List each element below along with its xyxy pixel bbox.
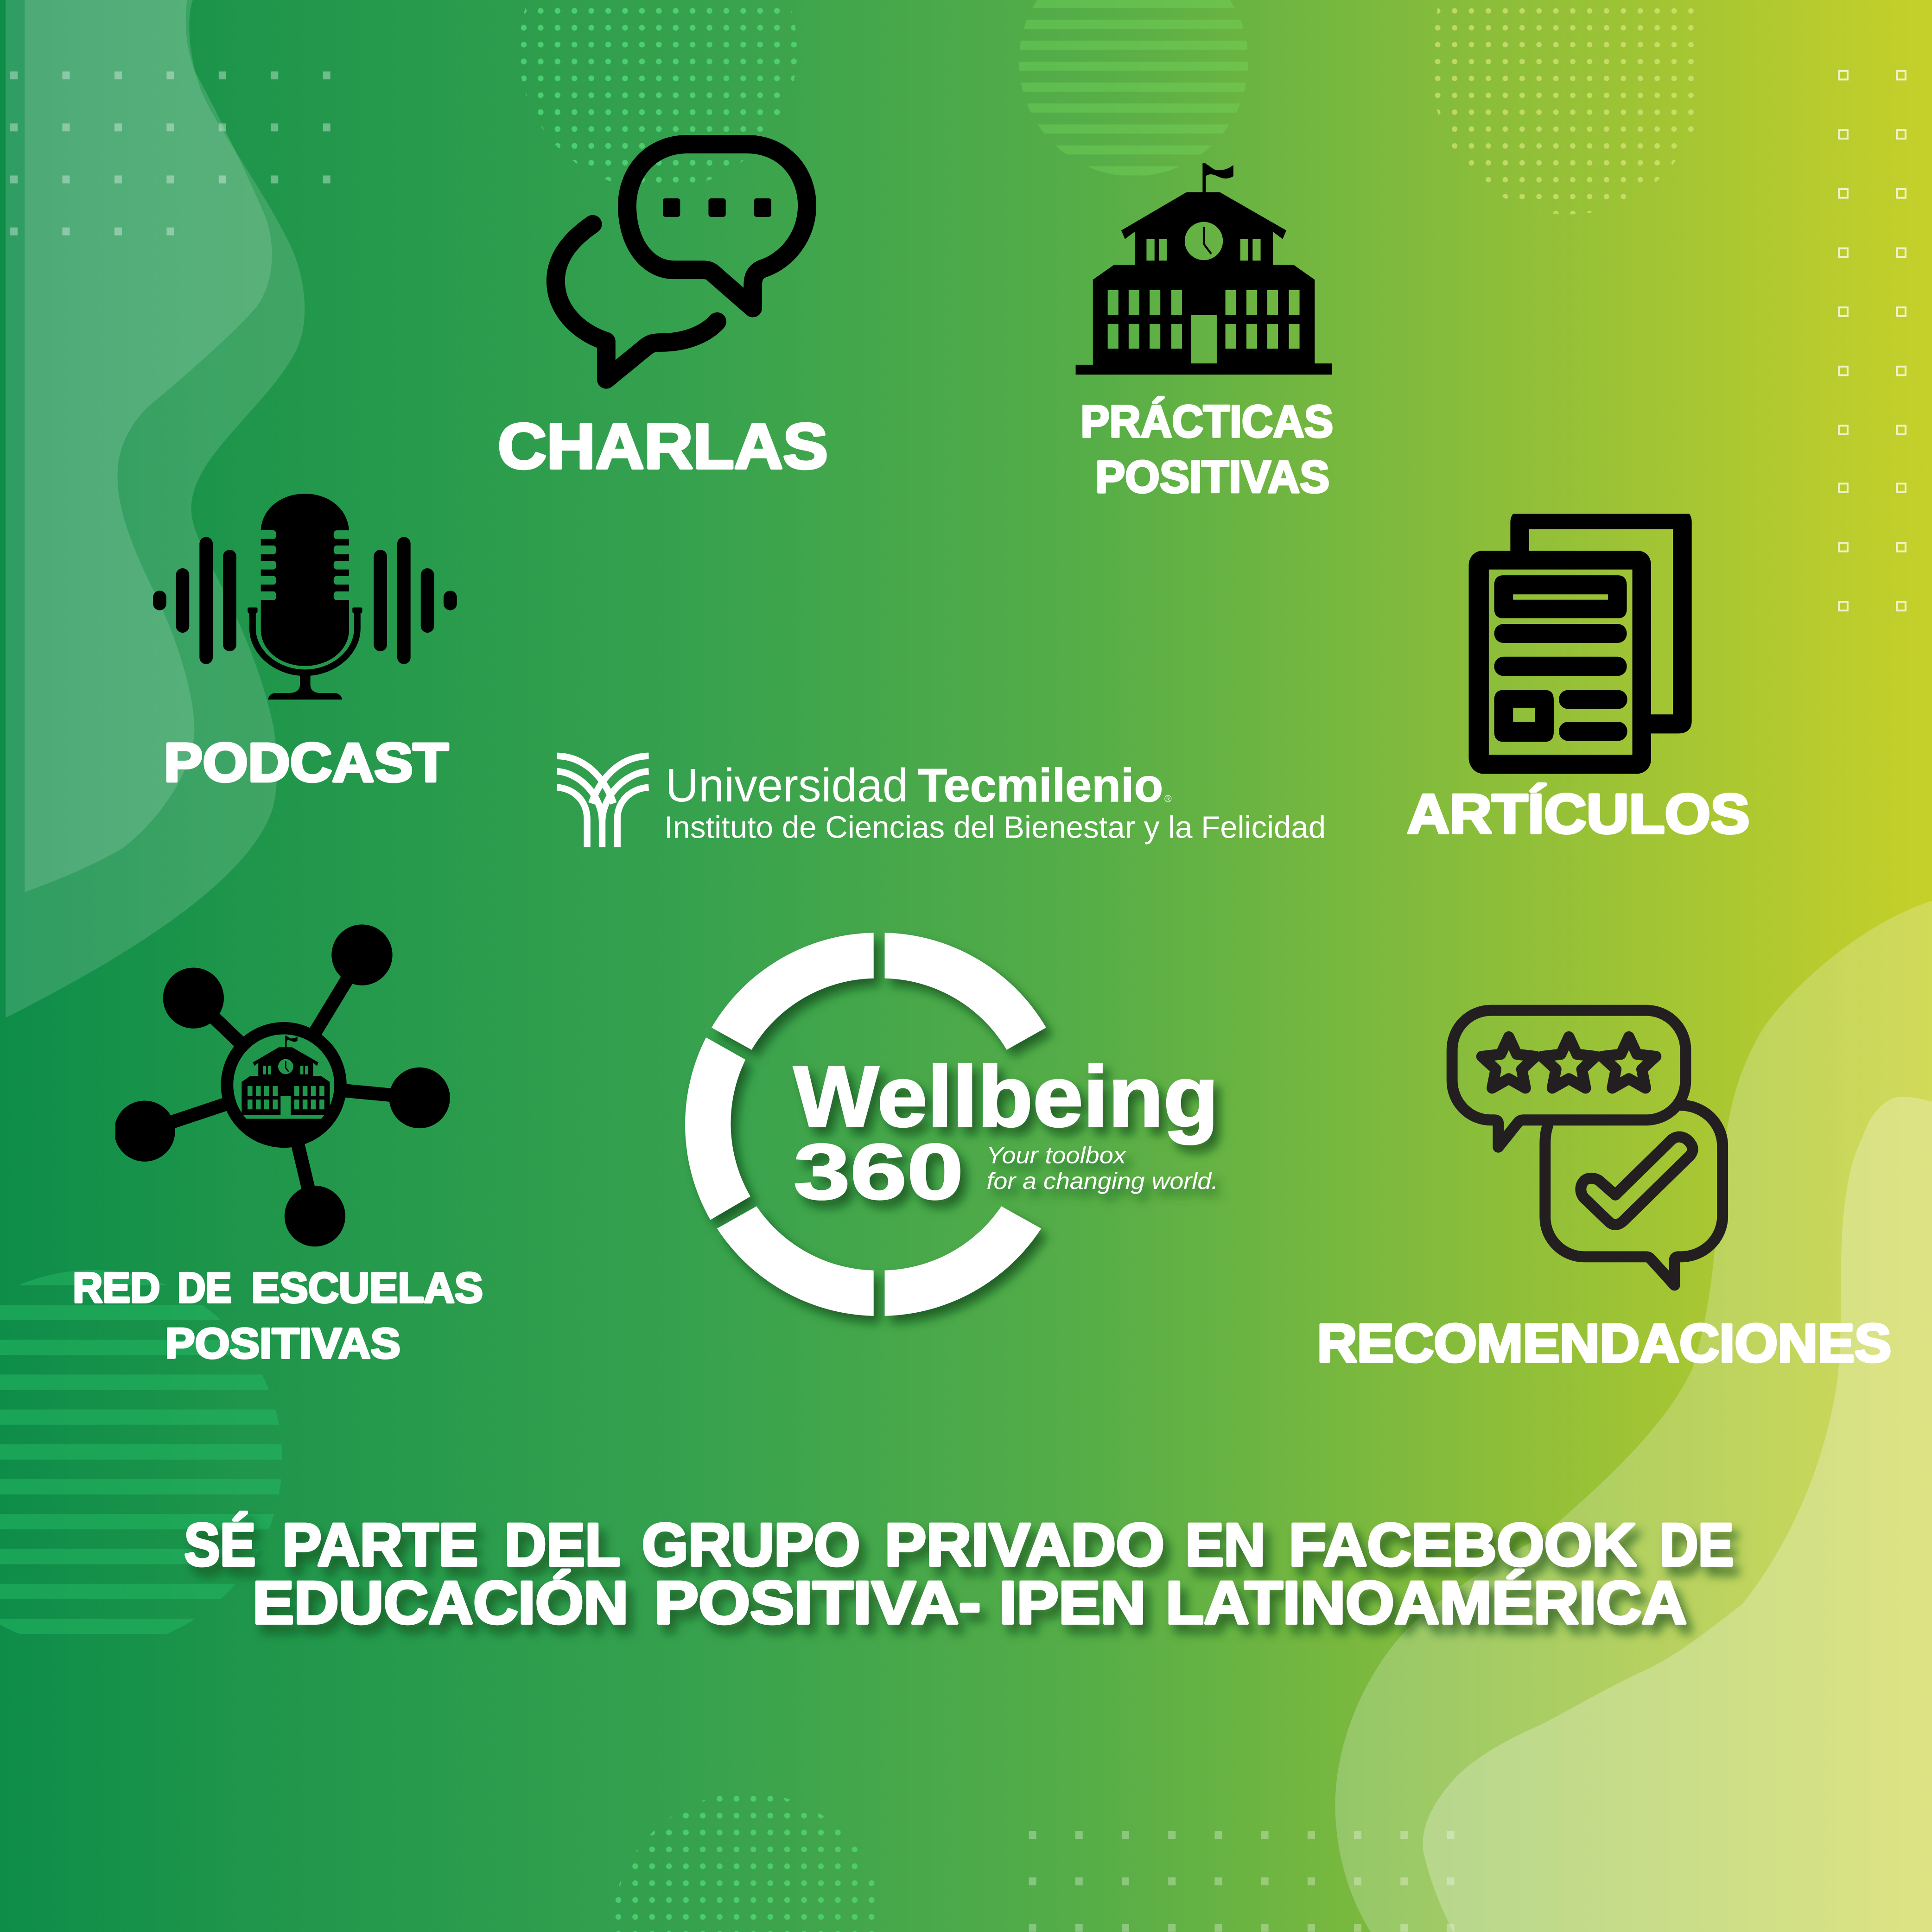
call to action: EN <box>1185 1511 1265 1578</box>
call to action: SÉ <box>184 1511 256 1578</box>
dot grid: bottom squares <box>1029 1831 1460 1932</box>
heading: Charlas: CHARLAS <box>498 411 828 482</box>
call to action: DE <box>1660 1511 1734 1578</box>
background wave: bottom-right inner <box>1423 1097 1932 1932</box>
call to action: FACEBOOK <box>1289 1511 1636 1578</box>
logo: Universidad Tecmilenio: Instituto de Ciencias del Bienestar y la Felicidad <box>664 811 1326 845</box>
call to action: IPEN <box>999 1569 1146 1636</box>
icon: school <box>1076 163 1332 375</box>
call to action: DEL <box>505 1511 620 1578</box>
background wave: left outer <box>6 0 305 1018</box>
logo text: Wellbeing: Wellbeing <box>794 1049 1219 1145</box>
heading: Red de Escuelas Positivas: ESCUELAS <box>251 1265 483 1312</box>
heading: Prácticas Positivas <box>1080 396 1333 502</box>
heading: Podcast: PODCAST <box>164 732 449 793</box>
dot grid: right hollow squares <box>1839 71 1906 610</box>
call to action: PARTE <box>282 1511 478 1578</box>
striped circle: bottom left <box>0 1270 282 1649</box>
dot grid: top left squares <box>10 71 333 242</box>
heading: Red de Escuelas Positivas <box>73 1265 483 1367</box>
icon: articles document <box>1469 514 1692 774</box>
heading: Prácticas Positivas: POSITIVAS <box>1095 451 1329 502</box>
logo tagline: for a changing world. <box>986 1168 1218 1194</box>
logo text: Universidad <box>665 760 908 812</box>
logo: Wellbeing 360 ring <box>685 933 1219 1316</box>
icon: chat bubbles <box>556 144 807 380</box>
logo: Universidad Tecmilenio <box>557 756 1326 847</box>
dotted circle: top right <box>1432 0 1705 215</box>
heading: Prácticas Positivas: PRÁCTICAS <box>1080 396 1333 446</box>
dotted circle: top <box>519 0 797 190</box>
striped circle: top <box>1019 0 1248 176</box>
logo: Universidad Tecmilenio: ® <box>1164 793 1172 804</box>
call to action: POSITIVA- <box>654 1569 981 1636</box>
call to action: GRUPO <box>642 1511 860 1578</box>
icon: Tecmilenio tree <box>557 756 649 847</box>
icon: podcast microphone <box>153 494 457 699</box>
call to action <box>184 1511 1734 1636</box>
logo tagline: Your toolbox <box>986 1142 1127 1168</box>
background wave: bottom-right outer <box>1335 901 1932 1932</box>
heading: Red de Escuelas Positivas: DE <box>178 1265 232 1312</box>
logo: Universidad Tecmilenio: Tecmilenio <box>918 760 1163 812</box>
background wave: left inner <box>25 0 272 892</box>
logo tagline <box>986 1142 1218 1194</box>
dotted circle: bottom <box>611 1793 885 1932</box>
logo text: 360: 360 <box>794 1128 964 1216</box>
call to action: PRIVADO <box>885 1511 1164 1578</box>
icon: reviews bubbles <box>1452 1010 1722 1285</box>
call to action: EDUCACIÓN <box>253 1569 629 1636</box>
heading: Red de Escuelas Positivas: POSITIVAS <box>165 1320 400 1367</box>
heading: Red de Escuelas Positivas: RED <box>73 1265 160 1312</box>
heading: Recomendaciones: RECOMENDACIONES <box>1317 1313 1891 1373</box>
heading: Artículos: ARTÍCULOS <box>1407 783 1750 845</box>
call to action: LATINOAMÉRICA <box>1166 1569 1687 1636</box>
icon: school network <box>114 924 450 1246</box>
